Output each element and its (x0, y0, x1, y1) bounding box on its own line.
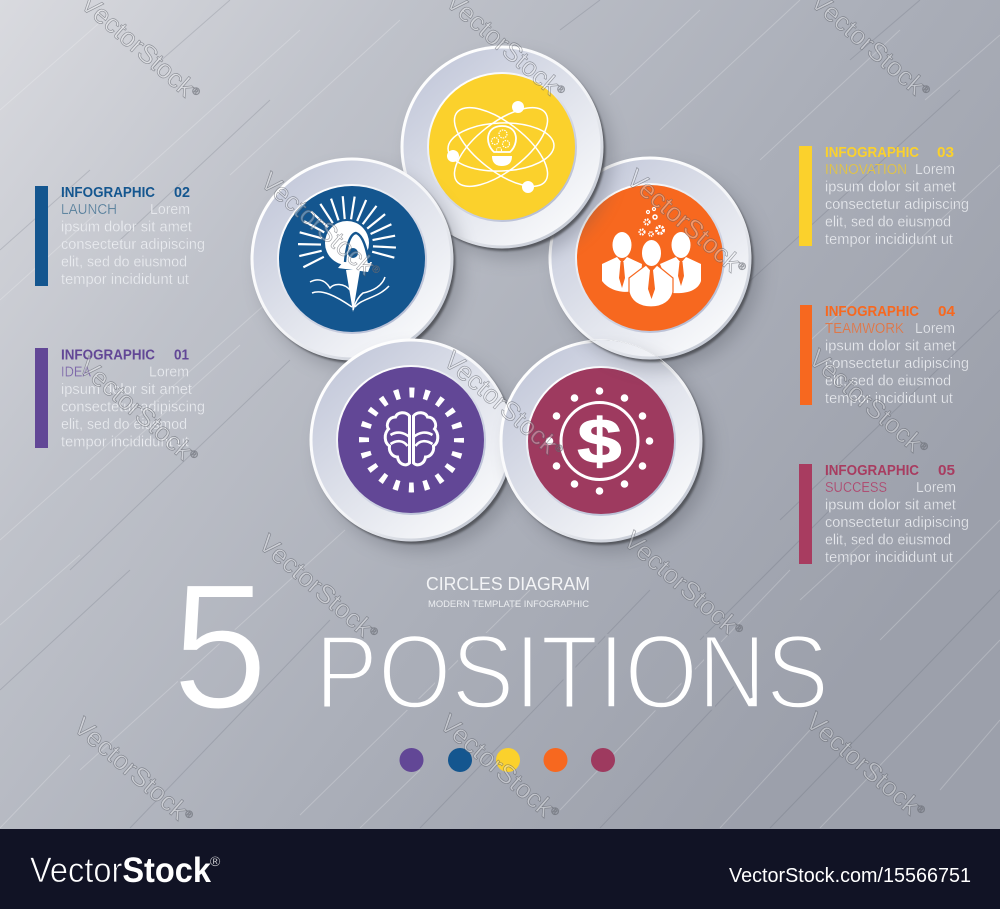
watermarks: VectorStock (803, 343, 927, 457)
panel: infographic 04 teamwork: consectetur adipiscing (825, 356, 969, 372)
watermarks: ® (187, 448, 200, 462)
icon: brain with dashes (364, 392, 459, 488)
circle: yellow innovation (400, 46, 612, 258)
panel: infographic 03 innovation: consectetur adipiscing (825, 197, 969, 213)
panel: infographic 01 idea: IDEA (61, 364, 91, 380)
panel: infographic 01 idea: ipsum dolor sit amet (61, 382, 192, 398)
panel: infographic 01 idea: elit, sed do eiusmod (61, 417, 187, 433)
circle: blue launch (250, 158, 462, 370)
watermarks (68, 0, 937, 831)
panel: infographic 04 teamwork: elit, sed do eiusmod (825, 374, 951, 390)
panel: infographic 05 success: ipsum dolor sit amet (825, 498, 956, 514)
icon: rocket with rays and open book (298, 196, 396, 312)
panel: infographic 05 success: tempor incididunt ut (825, 550, 953, 566)
subtitle: modern template: MODERN TEMPLATE INFOGRAPHIC (428, 599, 589, 610)
panel: infographic 03 innovation: ipsum dolor sit amet (825, 180, 956, 196)
circle: crimson success (500, 340, 711, 552)
watermarks: ® (554, 83, 567, 97)
watermarks: ® (548, 805, 561, 819)
panel: infographic 01 idea (35, 348, 205, 450)
panel: infographic 03 innovation (799, 145, 969, 248)
panel: infographic 05 success: consectetur adipiscing (825, 515, 969, 531)
watermarks: ® (735, 260, 748, 274)
panel: infographic 02 launch: LAUNCH (61, 202, 117, 218)
panel: infographic 01 idea: tempor incididunt ut (61, 434, 189, 450)
watermarks: ® (369, 263, 382, 277)
watermarks: VectorStock (800, 706, 924, 820)
footer bar (0, 829, 1000, 909)
panel: infographic 05 success: INFOGRAPHIC (825, 463, 919, 479)
legend dots (400, 748, 615, 772)
panel: infographic 01 idea: 01 (174, 348, 189, 364)
panel: infographic 01 idea: INFOGRAPHIC (61, 348, 155, 364)
watermarks: VectorStock (618, 525, 742, 639)
circle: orange teamwork (548, 156, 760, 369)
panel: infographic 02 launch: elit, sed do eiusmod (61, 254, 187, 270)
watermarks: ® (189, 85, 202, 99)
watermarks: ® (182, 808, 195, 822)
watermarks: VectorStock (68, 711, 192, 825)
panel: infographic 05 success: elit, sed do eiusmod (825, 532, 951, 548)
panel: infographic 05 success: Lorem (916, 480, 956, 496)
panel: infographic 02 launch: ipsum dolor sit amet (61, 220, 192, 236)
panel: infographic 04 teamwork: ipsum dolor sit amet (825, 338, 956, 354)
watermarks: VectorStock (255, 166, 379, 280)
panel: infographic 03 innovation: INFOGRAPHIC (825, 145, 919, 161)
title: big 5: 5 (172, 546, 268, 746)
panel: infographic 01 idea: consectetur adipiscing (61, 400, 205, 416)
watermarks: VectorStock (621, 163, 745, 277)
panel: infographic 04 teamwork (800, 304, 969, 407)
watermarks: ® (732, 622, 745, 636)
panel: infographic 02 launch: INFOGRAPHIC (61, 185, 155, 201)
panel: infographic 02 launch: Lorem (150, 202, 190, 218)
panel: infographic 05 success: 05 (938, 463, 955, 479)
footer image id: VectorStock.com/15566751 (729, 865, 971, 887)
footer registered mark: ® (210, 853, 221, 869)
watermarks: ® (367, 625, 380, 639)
subtitle: circles diagram: CIRCLES DIAGRAM (426, 574, 590, 594)
panel: infographic 02 launch: tempor incididunt ut (61, 272, 189, 288)
panel: infographic 02 launch (35, 185, 205, 288)
circle: purple idea (310, 338, 521, 551)
icon: dollar coin with dots (546, 387, 653, 495)
watermarks: VectorStock (253, 528, 377, 642)
panel: infographic 05 success: SUCCESS (825, 480, 887, 496)
icon: dollar coin with dots: $ (578, 407, 622, 477)
panel: infographic 04 teamwork: INFOGRAPHIC (825, 304, 919, 320)
watermarks: ® (919, 83, 932, 97)
panel: infographic 03 innovation: elit, sed do eiusmod (825, 214, 951, 230)
watermarks: ® (914, 803, 927, 817)
panel: infographic 02 launch: consectetur adipiscing (61, 237, 205, 253)
title: positions: POSITIONS (315, 614, 829, 731)
panel: infographic 04 teamwork: TEAMWORK (825, 321, 904, 337)
panel: infographic 04 teamwork: tempor incididunt ut (825, 391, 953, 407)
panel: infographic 04 teamwork: Lorem (915, 321, 955, 337)
icon: team of people with gears (602, 208, 701, 307)
panel: infographic 04 teamwork: 04 (938, 304, 955, 320)
icon: atom with light bulb (442, 94, 560, 200)
watermarks: ® (917, 440, 930, 454)
panel: infographic 03 innovation: Lorem (915, 162, 955, 178)
watermarks: VectorStock (438, 345, 562, 459)
panel: infographic 03 innovation: 03 (937, 145, 954, 161)
watermarks: ® (552, 442, 565, 456)
footer logo: VectorStock (30, 851, 211, 890)
panel: infographic 02 launch: 02 (174, 185, 190, 201)
panel: infographic 05 success (799, 463, 969, 566)
overlap: orange plate over crimson plate (579, 340, 678, 378)
panel: infographic 01 idea: Lorem (149, 364, 189, 380)
watermarks: VectorStock (73, 351, 197, 465)
panel: infographic 03 innovation: tempor incididunt ut (825, 232, 953, 248)
panel: infographic 03 innovation: INNOVATION (825, 162, 907, 178)
watermarks: VectorStock (434, 708, 558, 822)
